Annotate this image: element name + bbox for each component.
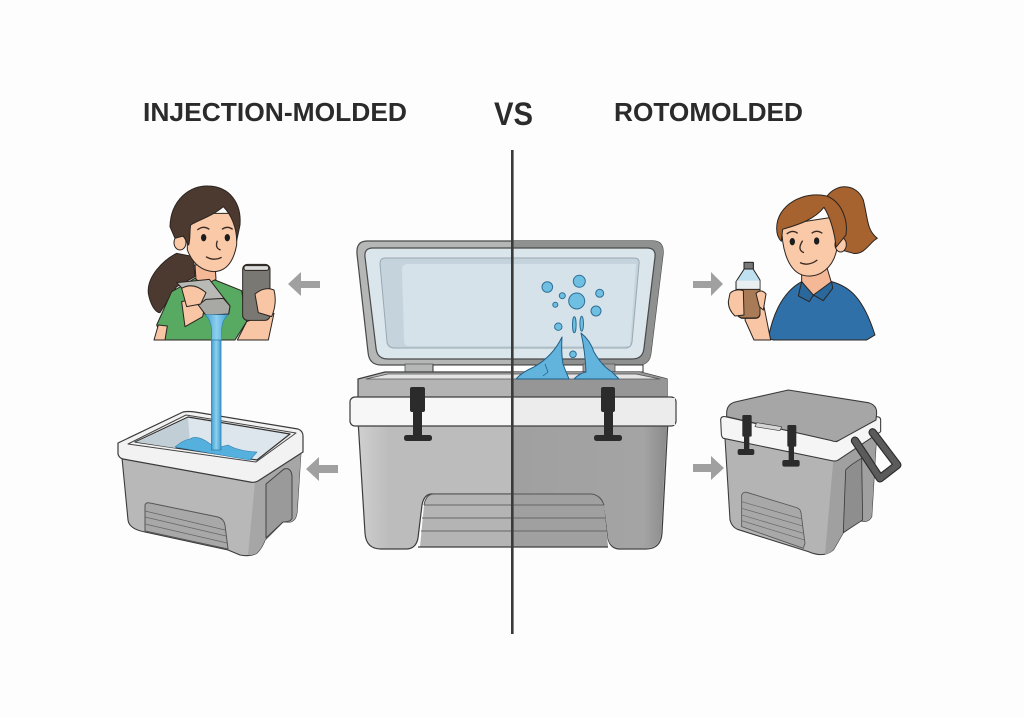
- cooler body: [358, 420, 668, 549]
- side: [825, 433, 877, 554]
- person left pouring: [148, 186, 275, 341]
- arrow: bottom right: [693, 456, 724, 480]
- title: injection-molded: INJECTION-MOLDED: [143, 97, 407, 127]
- ponytail: [827, 187, 877, 253]
- cooler rim: [358, 372, 667, 403]
- title: vs: VS: [494, 96, 533, 132]
- arrow: top right: [693, 272, 723, 296]
- collar: [798, 282, 833, 302]
- stream: [212, 340, 221, 450]
- ponytail: [148, 253, 195, 313]
- side recess: [266, 469, 292, 538]
- vent: [742, 492, 805, 548]
- divider line: [511, 150, 514, 634]
- cup: [243, 264, 270, 320]
- ear: [835, 237, 846, 252]
- cooler body: [122, 450, 301, 556]
- title: rotomolded: ROTOMOLDED: [614, 97, 803, 127]
- shirt: [768, 282, 875, 340]
- person right with bottle: [728, 187, 877, 340]
- forearm left: [182, 297, 207, 327]
- hand: [728, 290, 744, 316]
- cooler lid: [357, 241, 663, 365]
- neck: [802, 267, 832, 298]
- vent: [145, 503, 228, 549]
- bubbles: [542, 275, 604, 358]
- forearm: [745, 303, 771, 340]
- arrow: top left: [288, 272, 320, 296]
- handle: [855, 432, 897, 478]
- central cooler: [350, 241, 676, 549]
- side recess: [843, 458, 863, 533]
- eyes: [201, 234, 230, 241]
- brows and mouth: [787, 231, 822, 264]
- latches: [738, 415, 800, 467]
- body side shading: [248, 452, 301, 555]
- left hand: [182, 286, 206, 307]
- cavity: [135, 417, 290, 460]
- arrow: bottom left: [306, 457, 338, 481]
- right hand: [255, 289, 275, 317]
- rim line: [128, 415, 296, 462]
- brows and mouth: [197, 227, 233, 259]
- ear: [174, 235, 186, 250]
- neck: [195, 263, 216, 285]
- lid: [727, 390, 877, 441]
- hair: [777, 195, 846, 247]
- tool front: [198, 298, 230, 315]
- latch slot: [755, 423, 782, 431]
- water pool: [175, 437, 257, 460]
- right forearm: [237, 313, 274, 340]
- eyes: [790, 237, 819, 245]
- rim: [118, 412, 303, 482]
- bottle: [736, 262, 760, 318]
- small rotomolded cooler: [721, 390, 897, 555]
- stream top: [205, 315, 228, 341]
- hair: [170, 186, 240, 245]
- face: [187, 213, 237, 272]
- cavity shade: [136, 418, 190, 448]
- hinges: [405, 364, 643, 373]
- small injection-molded cooler: [118, 412, 303, 556]
- white band: [350, 397, 676, 426]
- face: [782, 217, 837, 276]
- body: [725, 433, 877, 555]
- shirt: [157, 278, 247, 340]
- latch left: [404, 387, 432, 441]
- white band: [721, 417, 881, 461]
- water splash: [516, 333, 619, 379]
- left arm: [154, 325, 167, 340]
- mold tool: [177, 279, 230, 315]
- ventilation recess: [418, 494, 608, 547]
- thumb: [756, 291, 766, 310]
- latch right: [594, 387, 622, 441]
